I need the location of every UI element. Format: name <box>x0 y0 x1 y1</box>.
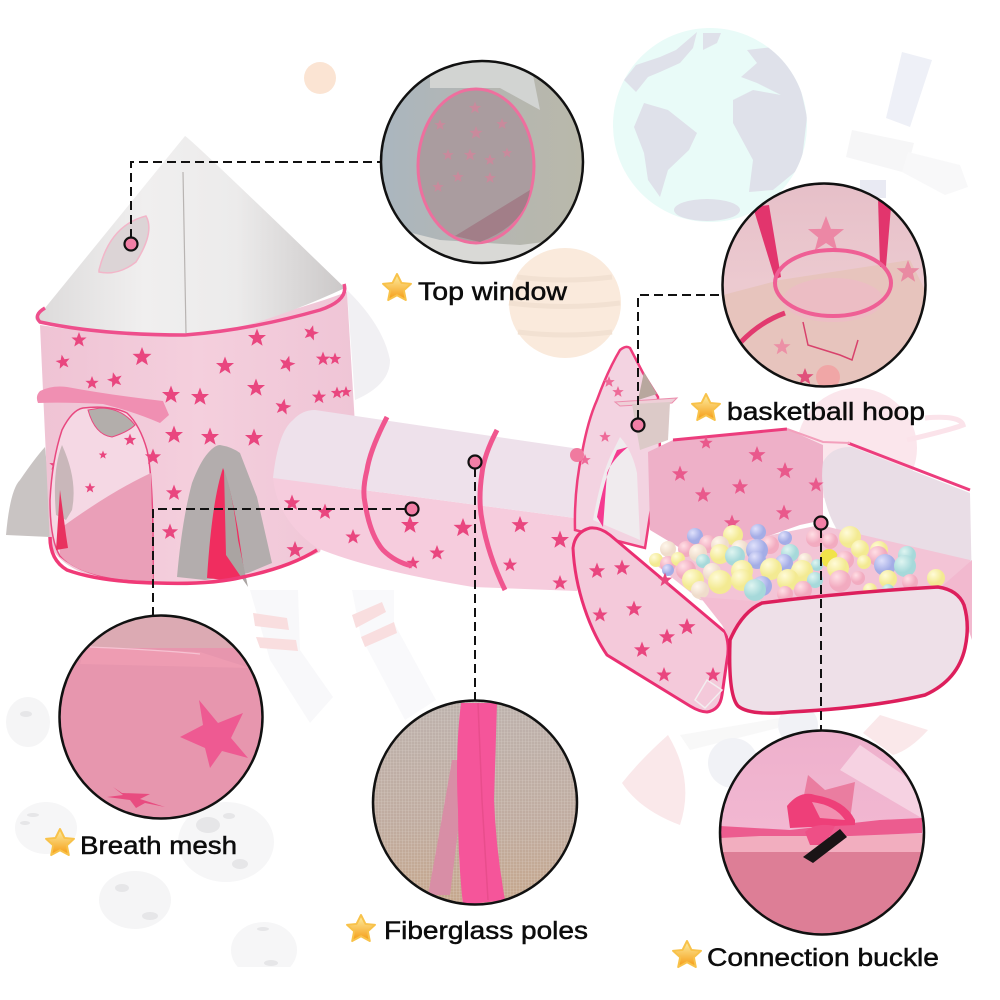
dashed leader <box>820 529 822 731</box>
red inner door <box>207 468 245 581</box>
back window inside door <box>88 408 135 437</box>
gold star icon <box>692 394 720 420</box>
pit back wall <box>648 429 823 560</box>
inner door floor <box>58 473 153 581</box>
dashed leader <box>153 509 405 616</box>
detail circle <box>380 60 584 265</box>
tunnel hoop 1 <box>364 417 412 566</box>
detail circle <box>58 614 265 820</box>
label: breath mesh: Breath mesh <box>80 832 237 860</box>
tent bottom rim <box>50 537 317 583</box>
detail circle <box>718 730 926 937</box>
callout: connection buckle <box>718 516 926 937</box>
interior stars <box>85 434 161 492</box>
detail circle <box>720 180 930 390</box>
pit floor <box>650 525 970 610</box>
rolled door flap <box>37 386 169 423</box>
tent stars <box>49 323 352 539</box>
anchor dot <box>814 516 828 530</box>
label: connection buckle: Connection buckle <box>707 944 939 972</box>
gold star icon <box>673 941 701 967</box>
front door grey flap <box>177 445 272 580</box>
faint moons <box>6 697 297 978</box>
callout: breath mesh <box>58 502 418 820</box>
callout: top window <box>124 60 584 265</box>
inner door flap <box>55 445 74 520</box>
label: fiberglass poles: Fiberglass poles <box>384 917 588 945</box>
dashed leader <box>131 162 381 238</box>
faint right fin <box>347 290 390 400</box>
left panel stars <box>589 560 721 681</box>
label: connection buckle <box>673 941 939 972</box>
ball pit <box>570 347 972 713</box>
anchor dot <box>124 238 138 250</box>
tunnel hoop 2 <box>480 430 505 590</box>
crawl tunnel <box>273 410 600 591</box>
dashed leader <box>474 468 476 701</box>
pit front mesh panel <box>730 587 967 713</box>
pit right mesh panel <box>822 447 972 590</box>
pit base strap <box>695 680 722 708</box>
cone window <box>99 216 149 273</box>
small orange planet <box>304 62 336 94</box>
pit knob at tunnel join <box>570 448 584 462</box>
hoop and net <box>615 398 677 450</box>
anchor dot <box>406 502 418 516</box>
anchor dot <box>468 456 482 468</box>
detail circle <box>372 700 578 906</box>
faint astronaut <box>250 590 436 723</box>
callout: fiberglass poles <box>372 456 578 906</box>
label: breath mesh <box>46 829 237 860</box>
gold star icon <box>383 274 411 300</box>
cone seam <box>183 172 186 333</box>
faint rocket <box>622 705 928 825</box>
silver cone <box>35 136 345 335</box>
pit corner flap <box>700 597 765 640</box>
door opening <box>50 407 153 581</box>
pit right corner <box>940 560 972 640</box>
anchor dot <box>632 418 644 432</box>
small tent arch <box>575 347 677 548</box>
gold star icon <box>46 829 74 855</box>
flap tail <box>224 470 248 587</box>
tent body <box>40 292 355 584</box>
callout: basketball hoop <box>632 180 930 432</box>
label: top window: Top window <box>418 278 568 306</box>
tunnel upper mesh <box>273 410 600 520</box>
label: basketball hoop <box>692 394 925 426</box>
peach planet <box>509 248 621 358</box>
earth globe <box>613 28 807 222</box>
pit top edge <box>673 429 970 490</box>
pit wall stars <box>672 436 824 530</box>
tunnel stars <box>284 494 569 589</box>
dashed leader <box>638 295 723 419</box>
left grey fin <box>6 447 52 537</box>
rocket tent <box>6 136 390 587</box>
label: top window <box>383 274 568 306</box>
pit left front panel <box>573 528 728 712</box>
gold star icon <box>347 915 375 941</box>
pink ringed planet <box>797 388 963 508</box>
tunnel lower pink fabric <box>273 478 590 591</box>
satellite <box>846 52 968 198</box>
label: basketball hoop: basketball hoop <box>727 398 925 426</box>
pink rim <box>37 284 345 335</box>
colored balls <box>649 524 945 602</box>
